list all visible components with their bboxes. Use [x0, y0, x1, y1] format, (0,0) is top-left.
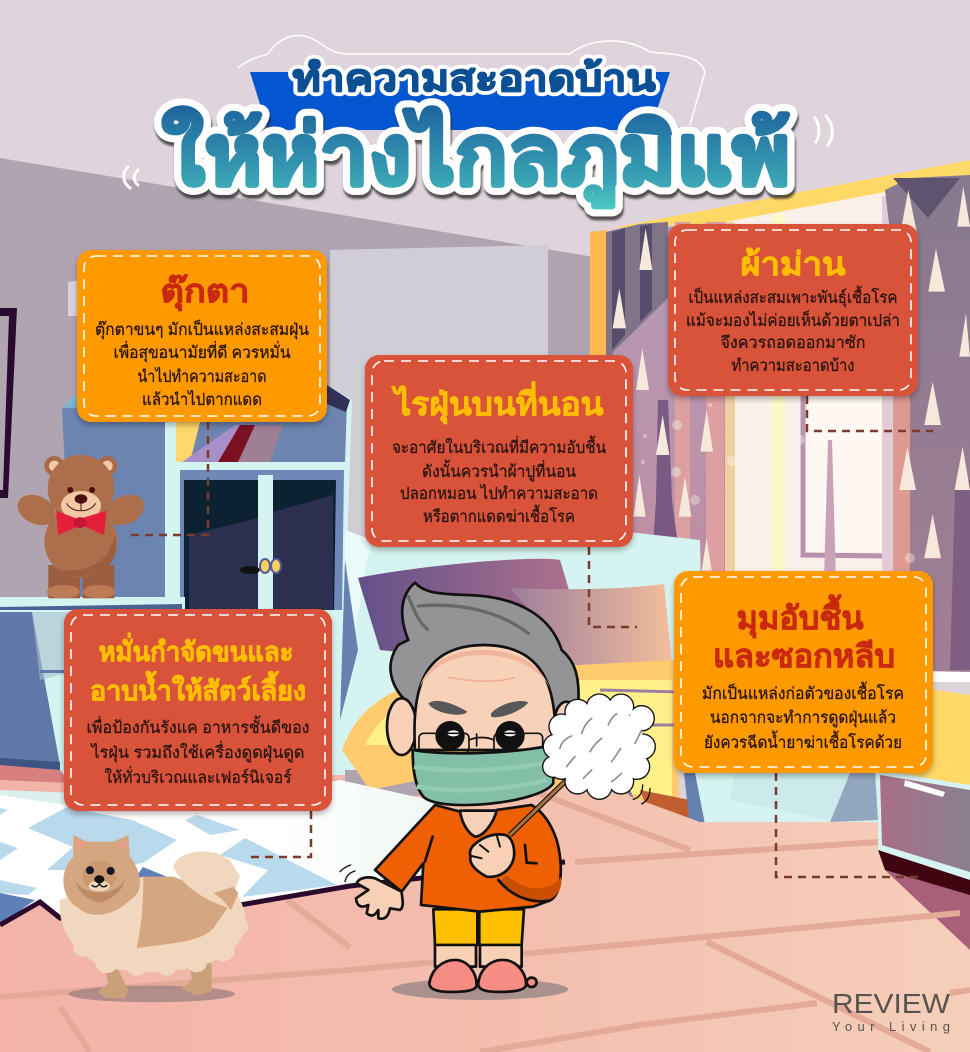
- body text: [86, 715, 310, 787]
- face: [414, 645, 555, 750]
- bed: [340, 530, 880, 850]
- body text: นอกจากจะทำการดูดฝุ่นแล้ว: [710, 709, 896, 728]
- ears: [387, 698, 416, 755]
- heading: [90, 632, 306, 706]
- slippers: [429, 960, 537, 992]
- heading: และซอกหลีบ: [713, 638, 895, 674]
- body text: [392, 435, 606, 526]
- neck: [460, 811, 497, 837]
- connector: curtain: [807, 396, 933, 431]
- motion marks: [124, 116, 832, 188]
- heading: ตุ๊กตา: [160, 273, 250, 312]
- icon: teddy bear: [13, 455, 149, 598]
- connector: corners: [776, 773, 920, 877]
- panel: damp corners: [674, 571, 933, 773]
- panel: dust mites on bedding: [365, 355, 633, 547]
- connector: doll: [128, 422, 208, 535]
- body text: ดังนั้นควรนำผ้าปูที่นอน: [422, 459, 576, 482]
- body text: [95, 319, 309, 409]
- title ribbon outline: [238, 35, 705, 125]
- body text: นำไปทำความสะอาด: [138, 367, 266, 386]
- panel: curtain: [668, 224, 918, 396]
- picture frame: [0, 308, 17, 498]
- panel: doll: [77, 250, 327, 422]
- sweater: [375, 805, 561, 912]
- body text: ให้ทั่วบริเวณและเฟอร์นิเจอร์: [104, 766, 292, 787]
- body text: [702, 681, 904, 752]
- wardrobe: [62, 385, 352, 612]
- body text: ยังควรฉีดน้ำยาฆ่าเชื้อโรคด้วย: [704, 730, 902, 752]
- logo: [832, 988, 951, 1034]
- heading: อาบน้ำให้สัตว์เลี้ยง: [90, 670, 306, 706]
- logo: REVIEW: [832, 988, 951, 1019]
- face mask: [413, 745, 553, 805]
- icon: pomeranian dog: [60, 835, 248, 1002]
- feather duster head: [543, 695, 655, 799]
- body text: ทำความสะอาดบ้าง: [732, 357, 854, 375]
- body text: เพื่อป้องกันรังแค อาหารชั้นดีของ: [86, 715, 310, 737]
- title: [124, 35, 832, 208]
- body text: ไรฝุ่น รวมถึงใช้เครื่องดูดฝุ่นดูด: [90, 741, 305, 763]
- left hand: [356, 877, 403, 919]
- right hand: [470, 834, 514, 877]
- title ribbon: [250, 72, 670, 130]
- shorts: [433, 909, 524, 945]
- title line 1: ทำความสะอาดบ้าน: [292, 58, 656, 100]
- heading: ผ้าม่าน: [740, 246, 846, 282]
- heading: มุมอับชื้น: [736, 594, 864, 639]
- arm fold: [500, 875, 562, 901]
- heading: [713, 594, 895, 674]
- legs: [435, 944, 522, 967]
- floor: [0, 765, 970, 1052]
- body text: [686, 285, 900, 375]
- connector: mites: [589, 547, 637, 627]
- window: [590, 160, 970, 580]
- hair: [390, 583, 579, 720]
- body text: ตุ๊กตาขนๆ มักเป็นแหล่งสะสมฝุ่น: [95, 319, 309, 340]
- duster stick: [510, 780, 567, 835]
- body text: จะอาศัยในบริเวณที่มีความอับชื้น: [392, 435, 606, 457]
- motion marks: [340, 785, 650, 882]
- icon: grandfather character with feather duster: [340, 583, 655, 1000]
- title line 2: ให้ห่างไกลภูมิแพ้: [162, 107, 790, 208]
- logo: Your Living: [832, 1019, 950, 1034]
- shadow: [392, 979, 568, 1000]
- body text: หรือตากแดดฆ่าเชื้อโรค: [423, 504, 575, 526]
- left dresser: [0, 597, 345, 800]
- body text: จึงควรถอดออกมาซัก: [720, 334, 866, 352]
- right drawers: [875, 670, 970, 890]
- body text: เพื่อสุขอนามัยที่ดี ควรหมั่น: [114, 341, 290, 363]
- body text: เป็นแหล่งสะสมเพาะพันธุ์เชื้อโรค: [688, 285, 898, 308]
- eyebrows: [428, 701, 528, 717]
- body text: ปลอกหมอน ไปทำความสะอาด: [400, 484, 598, 503]
- rug: [0, 780, 565, 925]
- title line 1: ทำความสะอาดบ้าน: [292, 58, 656, 100]
- body text: มักเป็นแหล่งก่อตัวของเชื้อโรค: [702, 681, 904, 703]
- body text: แม้จะมองไม่ค่อยเห็นด้วยตาเปล่า: [686, 310, 900, 330]
- heading: ไรฝุ่นบนที่นอน: [391, 381, 604, 425]
- eyes and glasses: [419, 721, 543, 753]
- title line 2: ให้ห่างไกลภูมิแพ้: [162, 107, 790, 208]
- heading: หมั่นกำจัดขนและ: [98, 632, 294, 667]
- panel: pets: [64, 609, 332, 811]
- connector: pets: [250, 811, 311, 857]
- curtains: [606, 175, 970, 680]
- body text: แล้วนำไปตากแดด: [142, 390, 262, 409]
